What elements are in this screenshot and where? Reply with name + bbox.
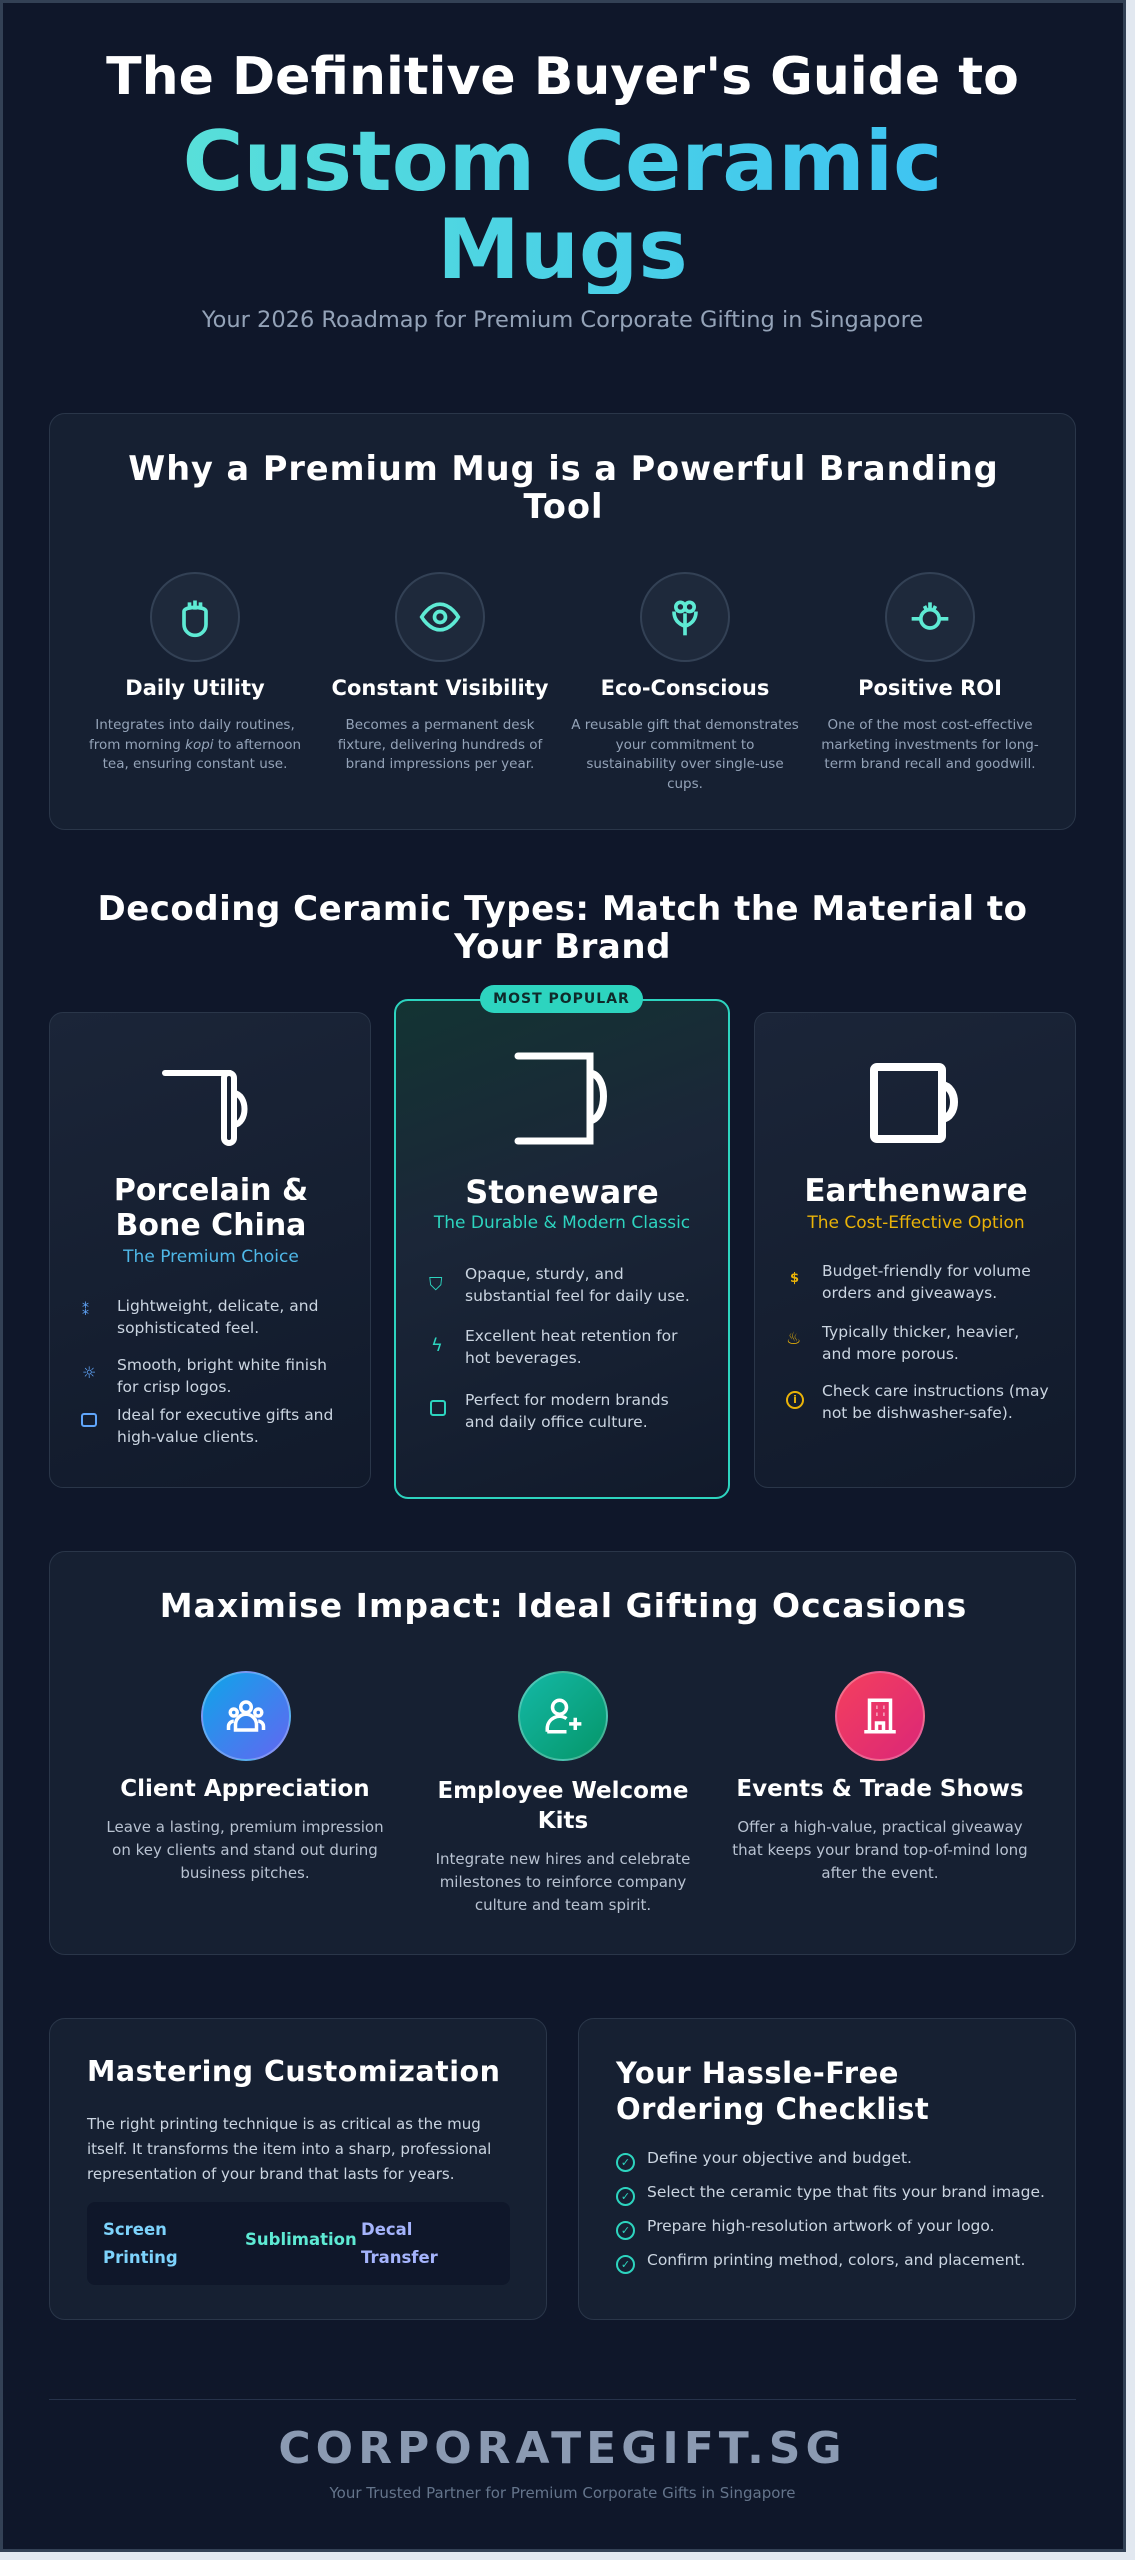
title: Porcelain & (114, 1173, 308, 1208)
checklist: ✓ (621, 2224, 630, 2237)
subtitle: The Cost-Effective Option (807, 1213, 1025, 1233)
subtitle: The Premium Choice (123, 1247, 299, 1267)
title: The Definitive Buyer's Guide to (106, 47, 1019, 107)
heading: Ordering Checklist (616, 2092, 929, 2126)
heading: Maximise Impact: Ideal Gifting Occasions (160, 1586, 967, 1625)
feature: daily utility: Integrates into daily routines, from morning kopi to afternoon tea, ensuring constant use. (89, 717, 301, 772)
checklist: Select the ceramic type that fits your brand image. (647, 2183, 1045, 2201)
footer: brand: CORPORATEGIFT.SG (278, 2423, 847, 2474)
paragraph: The right printing technique is as critical as the mug itself. It transforms the item into a sharp, professional representation of your brand that lasts for years. (87, 2115, 491, 2183)
checklist: Confirm printing method, colors, and placement. (647, 2251, 1025, 2269)
card: porcelain: Smooth, bright white finish for crisp logos. (117, 1356, 327, 1396)
icon: eco (640, 572, 730, 662)
card: porcelain: ☼ (82, 1363, 96, 1382)
heading: Tool (524, 487, 603, 526)
card: stoneware (most popular): Excellent heat retention for hot beverages. (465, 1327, 678, 1367)
occasion: employee: Employee Welcome (437, 1778, 689, 1804)
footer: tagline: Your Trusted Partner for Premium Corporate Gifts in Singapore (330, 2484, 795, 2502)
card: earthenware: i (793, 1393, 797, 1406)
title: Bone China (116, 1208, 306, 1243)
checklist: ✓ (621, 2190, 630, 2203)
panel: gifting occasions (49, 1551, 1076, 1955)
methods box: Printing (103, 2248, 178, 2267)
feature: visibility: Becomes a permanent desk fixture, delivering hundreds of brand impressions per year. (338, 717, 542, 772)
checklist (616, 2149, 1045, 2274)
icon: employee (518, 1671, 608, 1761)
heading: ceramic types: Decoding Ceramic Types: Match the Material to (98, 889, 1028, 929)
icon: thin mug (162, 1070, 248, 1146)
icon: client (201, 1671, 291, 1761)
title (106, 47, 1019, 298)
icon: sturdy mug (514, 1052, 607, 1144)
methods box (87, 2202, 510, 2285)
icon: daily utility (150, 572, 240, 662)
feature: eco: A reusable gift that demonstrates your commitment to sustainability over single-use cups. (571, 717, 799, 792)
occasion: client: Leave a lasting, premium impression on key clients and stand out during business pitches. (106, 1818, 384, 1882)
feature: eco (571, 676, 799, 792)
feature: roi (821, 676, 1039, 772)
panel: why a premium mug (49, 413, 1076, 830)
list: Opaque, sturdy, and substantial feel for daily use. (465, 1265, 690, 1305)
panel: mastering customization (49, 2018, 547, 2320)
occasion: employee: Kits (538, 1808, 588, 1834)
card: porcelain (49, 1012, 371, 1488)
icon: roi (885, 572, 975, 662)
subtitle: The Durable & Modern Classic (434, 1213, 690, 1233)
icon: events (835, 1671, 925, 1761)
card: stoneware (most popular): ϟ (431, 1335, 443, 1356)
feature: daily utility (89, 676, 301, 772)
feature: roi: One of the most cost-effective marketing investments for long-term brand recall and goodwill. (821, 717, 1039, 772)
heading: ceramic types (98, 889, 1028, 967)
checklist: Prepare high-resolution artwork of your logo. (647, 2217, 995, 2235)
feature: daily utility: Daily Utility (125, 676, 265, 700)
feature: eco: Eco-Conscious (601, 676, 769, 700)
badge: most popular (480, 985, 643, 1013)
title: Mugs (437, 201, 688, 298)
heading: Mastering Customization (87, 2055, 500, 2088)
card: stoneware (most popular): Perfect for modern brands and daily office culture. (465, 1391, 669, 1431)
occasion: events (732, 1776, 1028, 1882)
heading (616, 2056, 929, 2126)
card: earthenware: $ (790, 1271, 799, 1286)
subtitle: Your 2026 Roadmap for Premium Corporate Gifting in Singapore (202, 307, 923, 333)
occasion: employee: Integrate new hires and celebrate milestones to reinforce company culture and team spirit. (436, 1850, 690, 1914)
heading (128, 449, 999, 526)
occasion: client: Client Appreciation (120, 1776, 370, 1802)
heading: ceramic types: Your Brand (454, 927, 671, 967)
methods box: Decal (361, 2220, 412, 2239)
occasion: events: Offer a high-value, practical giveaway that keeps your brand top-of-mind long after the event. (732, 1818, 1028, 1882)
methods box: Sublimation (245, 2230, 357, 2249)
checklist: ✓ (621, 2156, 630, 2169)
checklist: Define your objective and budget. (647, 2149, 912, 2167)
icon: thick mug (870, 1063, 958, 1143)
icon: eye (395, 572, 485, 662)
feature: roi: Positive ROI (858, 676, 1002, 700)
list: Lightweight, delicate, and sophisticated feel. (117, 1297, 318, 1337)
methods box: Transfer (361, 2248, 438, 2267)
feature: visibility: Constant Visibility (332, 676, 548, 700)
card: stoneware (most popular): ⛉ (429, 1274, 442, 1295)
card: stoneware (most popular) (394, 999, 730, 1499)
occasion: events: Events & Trade Shows (736, 1776, 1024, 1802)
occasion: client (106, 1776, 384, 1882)
occasion: employee (436, 1778, 690, 1914)
card: earthenware: ♨ (786, 1329, 801, 1349)
panel: ordering checklist (578, 2018, 1076, 2320)
card: earthenware: Check care instructions (may not be dishwasher-safe). (822, 1382, 1049, 1422)
methods box: Screen (103, 2220, 167, 2239)
title: Stoneware (465, 1173, 659, 1211)
card: earthenware (754, 1012, 1076, 1488)
card: porcelain: Ideal for executive gifts and high-value clients. (117, 1406, 333, 1446)
badge: most popular: MOST POPULAR (493, 991, 630, 1007)
heading: Why a Premium Mug is a Powerful Branding (128, 449, 999, 488)
list: Budget-friendly for volume orders and giveaways. (822, 1262, 1031, 1302)
heading: Your Hassle-Free (616, 2056, 899, 2090)
checklist: ✓ (621, 2258, 630, 2271)
card: porcelain: ⁑ (82, 1303, 89, 1319)
feature: visibility (332, 676, 548, 772)
title (114, 1173, 308, 1243)
title: Custom Ceramic (183, 113, 942, 210)
title: Earthenware (804, 1173, 1028, 1209)
card: earthenware: Typically thicker, heavier, and more porous. (822, 1323, 1019, 1363)
